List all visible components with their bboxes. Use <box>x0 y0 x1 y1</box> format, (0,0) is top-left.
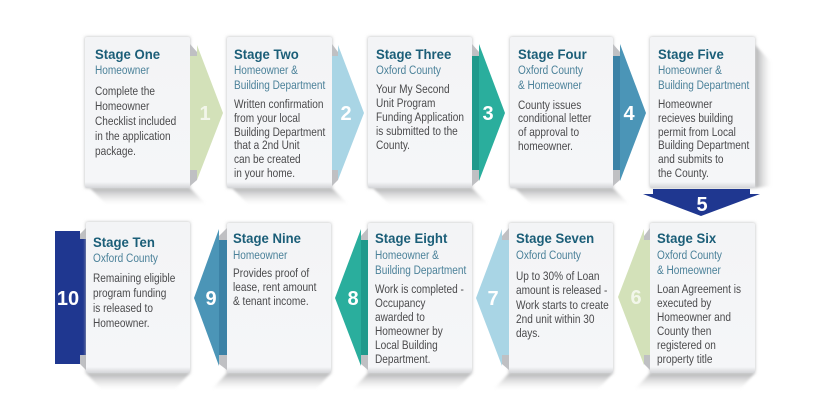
panel: stage ten: is released to <box>93 302 153 315</box>
panel: stage nine: Stage Nine <box>233 231 301 246</box>
panel: stage three: is submitted to the <box>376 125 458 138</box>
arrow: 8 <box>335 228 368 370</box>
panel: stage eight: awarded to <box>375 311 425 324</box>
panel: stage six: property title <box>657 353 712 366</box>
arrow: 4: 4 <box>623 103 635 125</box>
panel: stage nine: & tenant income. <box>233 295 309 308</box>
arrow: 3 <box>472 44 505 186</box>
panel: stage four: Stage Four <box>518 47 587 62</box>
panel: stage one: Checklist included <box>95 115 176 128</box>
panel: stage eight: Building Department <box>375 264 466 277</box>
panel: stage eight: Occupancy <box>375 297 426 310</box>
panel: stage two: Homeowner & <box>234 64 298 77</box>
panel: stage three: Oxford County <box>376 64 441 77</box>
panel: stage two: that a 2nd Unit <box>234 139 300 152</box>
panel: stage two: in your home. <box>234 167 295 180</box>
arrow: 7: 7 <box>487 288 499 310</box>
panel: stage two: from your local <box>234 112 300 125</box>
arrow: 6 <box>618 228 650 370</box>
panel: stage seven: amount is released - <box>516 284 608 297</box>
panel: stage four <box>510 37 629 204</box>
panel: stage nine: Provides proof of <box>233 267 310 280</box>
arrow: 10 <box>55 228 86 370</box>
panel: stage five: recieves building <box>658 112 733 125</box>
panel: stage six: County then <box>657 325 711 338</box>
panel: stage seven: Up to 30% of Loan <box>516 270 599 283</box>
panel: stage seven: Stage Seven <box>516 231 594 246</box>
arrow: 2: 2 <box>340 103 352 125</box>
panel: stage nine: lease, rent amount <box>233 281 316 294</box>
panel: stage eight <box>353 223 472 389</box>
arrow: 10: 10 <box>57 288 79 310</box>
arrow: 1 <box>190 44 223 186</box>
panel: stage eight: Department. <box>375 353 430 366</box>
panel: stage four: Oxford County <box>518 64 583 77</box>
panel: stage five: Stage Five <box>658 47 724 62</box>
panel: stage one: Complete the <box>95 85 155 98</box>
panel: stage four: & Homeowner <box>518 79 582 92</box>
panel: stage one <box>85 37 206 204</box>
panel: stage one: package. <box>95 145 136 158</box>
arrow: 2 <box>332 44 364 186</box>
panel: stage three: County. <box>376 139 410 152</box>
panel: stage four: homeowner. <box>518 140 573 153</box>
panel: stage two: Building Department <box>234 79 325 92</box>
arrow: 9: 9 <box>205 288 217 310</box>
arrow: 5: 5 <box>696 194 708 216</box>
panel: stage nine <box>212 223 331 389</box>
arrow: 4 <box>613 44 646 186</box>
panel: stage seven: days. <box>516 327 540 340</box>
arrow: 9 <box>194 228 227 370</box>
panel: stage three: Your My Second <box>376 83 450 96</box>
panel: stage five: and submits to <box>658 153 724 166</box>
panel: stage seven: Work starts to create <box>516 299 609 312</box>
panel: stage two: can be created <box>234 153 301 166</box>
panel: stage five: the County. <box>658 167 709 180</box>
panel: stage ten: Oxford County <box>93 252 158 265</box>
panel: stage three: Stage Three <box>376 47 452 62</box>
arrow: 1: 1 <box>199 103 211 125</box>
panel: stage six: Loan Agreement is <box>657 283 741 296</box>
arrow: 3: 3 <box>482 103 494 125</box>
panel: stage ten: Stage Ten <box>93 235 155 250</box>
panel: stage three: Funding Application <box>376 111 464 124</box>
panel: stage six: Stage Six <box>657 231 717 246</box>
panel: stage ten: Homeowner. <box>93 317 150 330</box>
panel: stage one: in the application <box>95 130 171 143</box>
arrow: 5 <box>643 189 760 216</box>
panel: stage seven <box>494 223 613 389</box>
arrow: 8: 8 <box>347 288 359 310</box>
panel: stage two: Building Department <box>234 126 325 139</box>
panel: stage six: Oxford County <box>657 249 722 262</box>
panel: stage five: Homeowner & <box>658 64 722 77</box>
panel: stage three <box>368 37 488 204</box>
arrow: 6: 6 <box>630 287 642 309</box>
panel: stage four: conditional letter <box>518 112 592 125</box>
panel: stage five: Building Department <box>658 79 749 92</box>
panel: stage seven: 2nd unit within 30 <box>516 313 594 326</box>
panel: stage eight: Homeowner by <box>375 325 443 338</box>
panel: stage six <box>635 223 755 389</box>
panel: stage one: Homeowner <box>95 100 150 113</box>
panel: stage ten: Remaining eligible <box>93 272 175 285</box>
panel: stage two: Written confirmation <box>234 98 323 111</box>
panel: stage five: permit from Local <box>658 126 736 139</box>
panel: stage ten <box>86 222 190 389</box>
panel: stage eight: Local Building <box>375 339 438 352</box>
panel: stage eight: Stage Eight <box>375 231 448 246</box>
panel: stage six: & Homeowner <box>657 264 721 277</box>
panel: stage six: executed by <box>657 297 712 310</box>
panel: stage eight: Work is completed - <box>375 283 464 296</box>
panel: stage two: Stage Two <box>234 47 299 62</box>
panel: stage ten: program funding <box>93 287 166 300</box>
panel: stage five <box>650 37 771 188</box>
panel: stage six: Homeowner and <box>657 311 731 324</box>
panel: stage four: County issues <box>518 99 582 112</box>
panel: stage six: registered on <box>657 339 716 352</box>
panel: stage nine: Homeowner <box>233 249 288 262</box>
panel: stage five: Building Department <box>658 139 749 152</box>
panel: stage one: Stage One <box>95 47 160 62</box>
panel: stage three: Unit Program <box>376 97 435 110</box>
panel: stage seven: Oxford County <box>516 249 581 262</box>
panel: stage five: Homeowner <box>658 98 713 111</box>
arrow: 7 <box>476 228 509 370</box>
panel: stage one: Homeowner <box>95 64 150 77</box>
panel: stage two <box>227 37 348 204</box>
panel: stage eight: Homeowner & <box>375 249 439 262</box>
panel: stage four: of approval to <box>518 126 579 139</box>
